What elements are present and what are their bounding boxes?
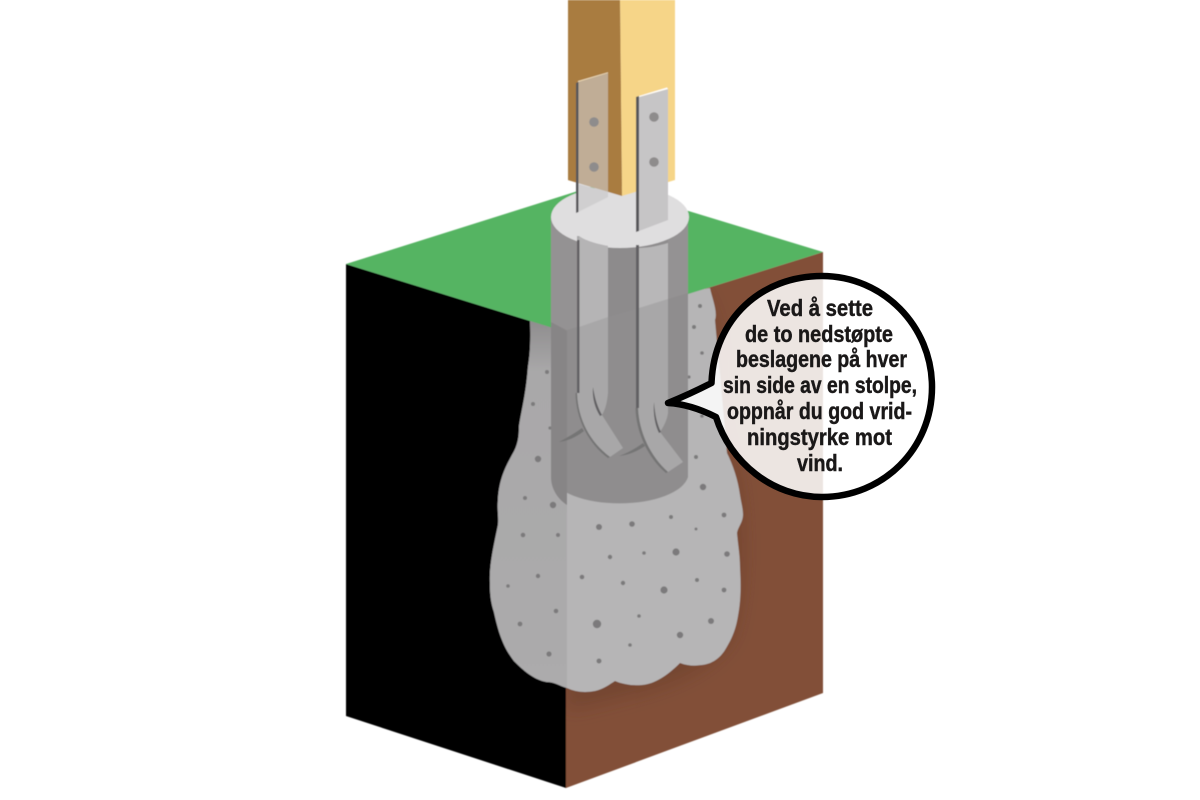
- concrete column: [551, 218, 688, 505]
- callout text: beslagene på hver: [736, 346, 907, 372]
- callout text: Ved å sette: [767, 295, 873, 321]
- callout text: vind.: [797, 450, 843, 476]
- callout text: [723, 295, 917, 476]
- column top: [551, 186, 689, 248]
- bracket: right, upper plate on post: [636, 88, 668, 232]
- callout text: de to nedstøpte: [745, 321, 893, 347]
- ground surface: grass: [346, 184, 823, 332]
- callout: speech bubble: [668, 276, 932, 497]
- ground block: right soil face: [566, 252, 823, 788]
- post: dark left face: [568, 0, 622, 196]
- bubble outline: [668, 276, 932, 497]
- concrete aggregate dots: [506, 304, 730, 664]
- bracket: left, in column and footing: [559, 236, 623, 458]
- ground block: left face: [346, 264, 566, 788]
- callout text: ningstyrke mot: [747, 424, 892, 450]
- bracket: left, upper plate on post: [576, 72, 608, 213]
- bracket: right, in column and footing: [619, 243, 683, 473]
- infographic: post anchored in concrete footing: [345, 0, 936, 789]
- callout text: oppnår du god vrid-: [727, 398, 912, 424]
- post: light right face: [620, 0, 675, 196]
- callout text: sin side av en stolpe,: [723, 372, 917, 398]
- concrete footing: [490, 288, 743, 692]
